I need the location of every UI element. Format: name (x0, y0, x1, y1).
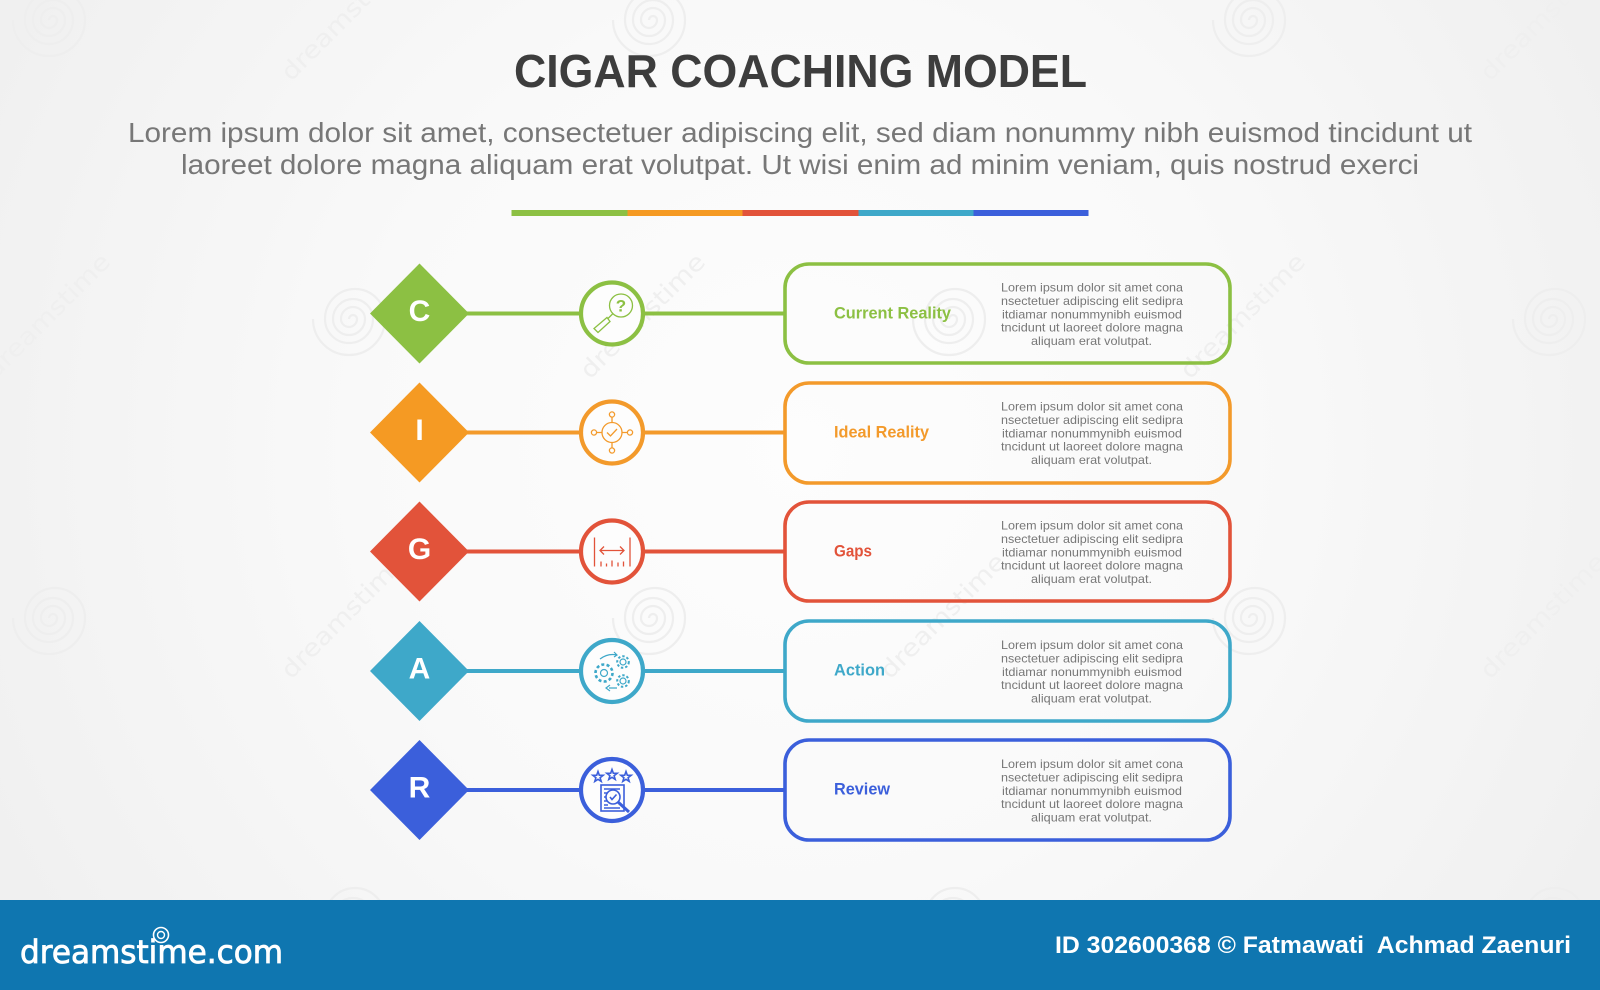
box: Action: nsectetuer adipiscing elit sedipra (1001, 652, 1183, 666)
box: Current Reality: Current Reality (834, 304, 952, 322)
box: Action: Action (834, 662, 885, 680)
diamond: R: R (409, 772, 431, 804)
watermark pattern: dreamstime (574, 248, 711, 384)
footer logo: dreamstime.com (20, 933, 283, 971)
divider: five-colour rule (512, 210, 1088, 216)
subtitle: Lorem ipsum dolor sit amet, consectetuer adipiscing elit, sed diam nonummy nibh euismod tincidunt ut (128, 117, 1472, 148)
row: C Current Reality (370, 264, 1230, 364)
box: Current Reality: Lorem ipsum dolor sit amet cona (1001, 280, 1183, 294)
box: Action: itdiamar nonummynibh euismod (1002, 665, 1182, 679)
box: Current Reality (785, 264, 1230, 363)
box: Action: aliquam erat volutpat. (1031, 692, 1152, 706)
footer bar (0, 900, 1600, 990)
box: Ideal Reality: aliquam erat volutpat. (1031, 453, 1152, 467)
box: Gaps: itdiamar nonummynibh euismod (1002, 545, 1182, 559)
row: A Action (370, 621, 1230, 721)
box: Review: nsectetuer adipiscing elit sedipra (1001, 770, 1183, 784)
watermark pattern: dreamstime (874, 548, 1011, 684)
box: Gaps: nsectetuer adipiscing elit sedipra (1001, 532, 1183, 546)
title: CIGAR COACHING MODEL (514, 45, 1087, 97)
row: R Review (370, 740, 1230, 840)
subtitle: laoreet dolore magna aliquam erat volutpat. Ut wisi enim ad minim veniam, quis nostrud exerci (181, 149, 1419, 180)
box: Current Reality: itdiamar nonummynibh euismod (1002, 307, 1182, 321)
row: G Gaps (370, 502, 1230, 602)
watermark pattern: dreamstime (275, 548, 412, 684)
icon: gap measurement (581, 520, 643, 582)
box: Review (785, 740, 1230, 840)
subtitle (128, 117, 1472, 180)
box: Ideal Reality: tncidunt ut laoreet dolore magna (1001, 440, 1183, 454)
footer credit: ID 302600368 © Fatmawati Achmad Zaenuri (1055, 932, 1571, 959)
box: Action (785, 621, 1230, 721)
icon: rated document with magnifier (581, 759, 643, 821)
box: Gaps (785, 502, 1230, 601)
diamond: I: I (415, 414, 424, 447)
diamond: C: C (409, 295, 430, 328)
box: Gaps: tncidunt ut laoreet dolore magna (1001, 559, 1183, 573)
watermark pattern: dreamstime (1474, 548, 1600, 684)
box: Ideal Reality: Ideal Reality (834, 424, 930, 442)
watermark pattern: dreamstime (1174, 248, 1311, 384)
box: Action: tncidunt ut laoreet dolore magna (1001, 678, 1183, 692)
diamond: G (370, 502, 469, 602)
box: Review: aliquam erat volutpat. (1031, 810, 1152, 824)
icon: magnifier with question mark (581, 282, 643, 344)
box: Gaps: Gaps (834, 542, 872, 560)
box: Current Reality: nsectetuer adipiscing elit sedipra (1001, 294, 1183, 308)
diamond: R (370, 740, 469, 840)
box: Ideal Reality: itdiamar nonummynibh euismod (1002, 426, 1182, 440)
icon: gears (581, 640, 643, 702)
box: Gaps: aliquam erat volutpat. (1031, 572, 1152, 586)
box: Ideal Reality: Lorem ipsum dolor sit amet cona (1001, 400, 1183, 414)
icon: magnifier with question mark: ? (616, 296, 626, 316)
icon: target with nodes (581, 402, 643, 464)
diamond: G: G (408, 533, 431, 566)
box: Current Reality: aliquam erat volutpat. (1031, 334, 1152, 348)
box: Review: Lorem ipsum dolor sit amet cona (1001, 757, 1183, 771)
diamond: I (370, 382, 469, 482)
box: Gaps: Lorem ipsum dolor sit amet cona (1001, 518, 1183, 532)
diamond: A: A (409, 652, 430, 686)
box: Action: Lorem ipsum dolor sit amet cona (1001, 638, 1183, 652)
box: Review: itdiamar nonummynibh euismod (1002, 784, 1182, 798)
box: Review: tncidunt ut laoreet dolore magna (1001, 797, 1183, 811)
diamond: C (370, 264, 469, 364)
diamond: A (370, 621, 469, 721)
box: Ideal Reality (785, 383, 1230, 483)
row: I Ideal Reality (370, 382, 1230, 483)
box: Current Reality: tncidunt ut laoreet dolore magna (1001, 321, 1183, 335)
box: Ideal Reality: nsectetuer adipiscing elit sedipra (1001, 413, 1183, 427)
box: Review: Review (834, 780, 890, 798)
